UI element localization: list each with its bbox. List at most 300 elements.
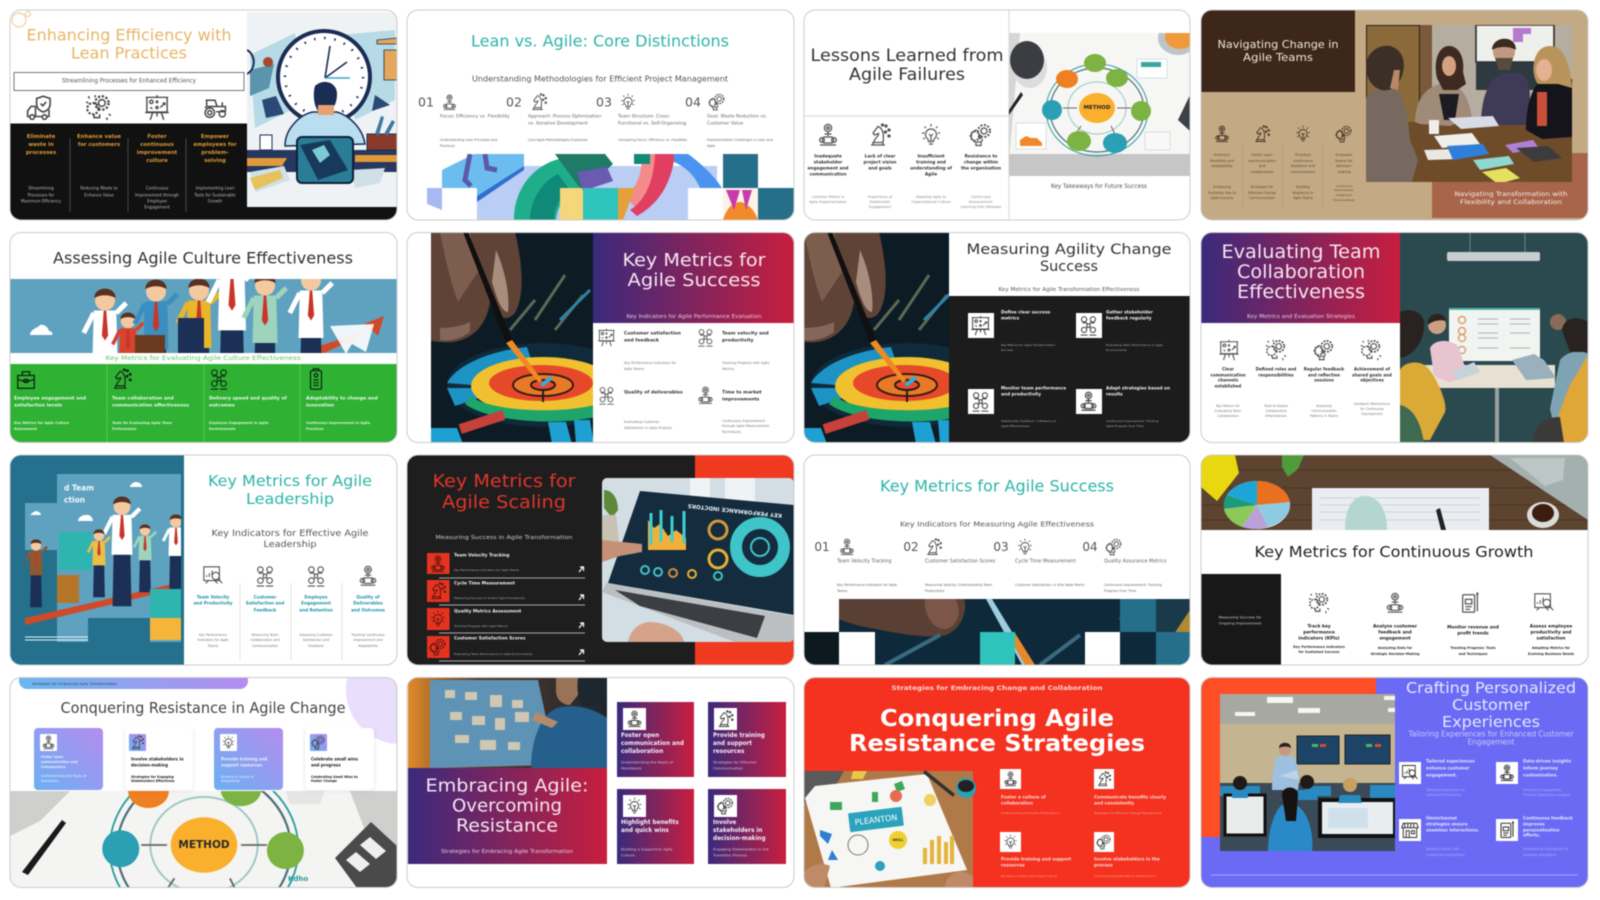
item labels: and reflection <box>1308 372 1340 378</box>
labels: decision- <box>1336 164 1353 168</box>
dark metrics panel: Stakeholder Feedback: A Measure of <box>1001 419 1057 423</box>
strategy tile 4: Transition Process <box>712 852 747 858</box>
dark metrics panel: Adapt strategies based on <box>1106 386 1170 392</box>
tag pill <box>19 672 248 689</box>
item notes: Collaborative <box>1265 409 1287 413</box>
title block: Agile Success <box>628 271 760 291</box>
insights grid: Continuous feedback <box>1523 816 1573 820</box>
numbered items <box>814 539 1167 593</box>
title block <box>1201 232 1400 323</box>
column notes: Growth <box>208 198 223 204</box>
column notes <box>21 186 236 210</box>
item labels: Employee <box>305 594 328 600</box>
slide 8: team collaboration <box>1201 232 1588 443</box>
title: Agile Failures <box>849 65 965 85</box>
item notes: Teams <box>207 644 218 648</box>
title: Success <box>1040 259 1098 275</box>
subtitle: Measuring Success in Agile Transformation <box>436 535 573 541</box>
image: meeting room photo <box>1400 232 1588 443</box>
notes: Effective Change <box>1248 191 1276 195</box>
dark metrics panel: Key Metrics for Agile Transformation <box>1001 343 1055 347</box>
green panel labels: innovation <box>306 402 334 408</box>
title block: Key Metrics for <box>622 251 766 271</box>
slide 4: navigating change <box>1201 10 1588 220</box>
green panel notes: Employee Engagement in Agile <box>209 421 269 425</box>
insights grid: Seamless Navigation <box>1523 853 1556 857</box>
insights grid: Through Data-Driven Insights <box>1522 793 1570 797</box>
image: team meeting photo <box>1366 25 1572 184</box>
item labels: Assess employee <box>1530 624 1572 630</box>
strategy tile 4: stakeholders in <box>713 828 762 834</box>
notes: Improvement: <box>1334 188 1354 192</box>
issue labels: change within <box>964 160 998 166</box>
dark metrics panel: Success <box>1001 348 1014 352</box>
strategy items: Involve stakeholders in the <box>1094 856 1160 862</box>
image: leadership illustration: d Team <box>64 484 94 492</box>
insights grid: efforts. <box>1523 832 1541 838</box>
column notes: Improvement through <box>135 192 179 198</box>
title block: Resistance <box>456 816 558 836</box>
column headings: Foster <box>147 134 167 140</box>
item labels: Feedback <box>254 608 276 612</box>
title block: Key Metrics and Evaluation Strategies <box>1247 314 1355 320</box>
dark metrics panel: Gather stakeholder <box>1106 310 1154 316</box>
strategy items: Communicating Benefits to Stakeholders <box>1094 874 1156 878</box>
insights grid: engagement. <box>1426 772 1458 778</box>
column notes: Streamlining <box>28 186 54 190</box>
column headings: continuous <box>140 142 174 148</box>
item notes: Feedback <box>308 644 324 648</box>
strategy cards: Strategies for Engaging <box>131 775 175 779</box>
metrics grid: Customer satisfaction <box>624 330 681 336</box>
column notes: Implementing Lean <box>196 186 235 190</box>
item labels: Team Velocity <box>197 594 230 600</box>
item labels: satisfaction <box>1536 636 1566 642</box>
item labels: Monitor revenue and <box>1447 624 1499 630</box>
strategy tile 3: Highlight benefits <box>621 820 679 826</box>
subtitle box <box>14 72 244 90</box>
insights grid: personalization <box>1523 828 1560 832</box>
numbered items: Team Structure: Cross- <box>617 114 671 120</box>
issue labels: and goals <box>868 166 892 172</box>
issue notes: Agile Implementation <box>809 200 847 204</box>
labels <box>1210 153 1353 174</box>
strategy cards: decision-making <box>131 762 168 768</box>
title block: Agile Teams <box>1243 52 1313 64</box>
subtitle <box>1408 730 1574 746</box>
dark metrics panel: Evaluating Team Performance in Agile <box>1106 343 1163 347</box>
image: method diagram on desk: METHOD <box>178 839 230 851</box>
metrics grid: Metrics <box>722 367 735 371</box>
dark metrics panel: Monitor team performance <box>1001 386 1066 392</box>
green panel notes: Key Metrics for Agile Culture <box>14 421 70 425</box>
numbered items: Cycle Time Measurement <box>1015 558 1076 564</box>
column headings: processes <box>26 150 56 156</box>
issue notes: Engagement <box>869 205 892 209</box>
title: Crafting Personalized <box>1406 679 1576 697</box>
decorative circle <box>346 636 454 744</box>
strategy cards: and progress <box>311 762 341 768</box>
metric list: Quality Metrics Assessment <box>454 608 521 614</box>
item labels: indicators (KPIs) <box>1298 636 1340 642</box>
numbered items: Continuous Improvement: Tracking <box>1104 583 1162 587</box>
title: Leadership <box>246 490 334 508</box>
issue labels: the organization <box>961 166 1001 172</box>
numbered items: Goal: Waste Reduction vs. <box>707 114 767 120</box>
icons row <box>820 124 990 146</box>
metrics grid: Agile Teams <box>624 367 644 371</box>
notes: Continuous <box>1336 184 1352 188</box>
image: business team illustration <box>10 278 398 354</box>
title <box>1406 679 1576 731</box>
item labels: sessions <box>1314 378 1334 382</box>
numbered items: 03 <box>993 540 1009 554</box>
image: method diagram on desk: Kdho <box>288 875 308 883</box>
column notes: Processes for <box>28 192 55 198</box>
numbered items: Productivity <box>925 589 945 593</box>
insights grid: inform journey <box>1523 766 1558 770</box>
issue notes: Continuous <box>971 195 991 199</box>
title: Conquering Agile <box>880 706 1114 732</box>
green panel notes: Tools for Evaluating Agile Team <box>112 421 172 425</box>
numbered items: Customer Satisfaction: A Vital Agile Metric <box>1015 583 1085 587</box>
strategy tile 2: Strategies for Effective <box>713 760 757 764</box>
metrics grid: Evaluating Customer <box>624 420 660 424</box>
numbered items: 04 <box>685 94 701 110</box>
labels: Foster open <box>1251 153 1273 157</box>
title: Lessons Learned from <box>810 46 1004 66</box>
metric list: Measuring Success in Scaled Agile Frameworks <box>454 596 525 600</box>
dark metrics panel: metrics <box>1001 316 1020 322</box>
numbered items: Customer Satisfaction Scores <box>925 558 996 564</box>
strategy cards: Involve stakeholders in <box>131 756 184 762</box>
item labels: Track key <box>1307 624 1331 630</box>
subtitle: Key Indicators for Effective Agile <box>212 529 368 539</box>
labels: making <box>1337 170 1351 174</box>
item labels: Analyze customer <box>1373 624 1418 630</box>
strategy tile 4: Involve <box>713 820 736 826</box>
slide 14: embracing agile <box>407 677 794 888</box>
item labels: Customer <box>254 594 277 600</box>
item labels: performance <box>1303 630 1335 636</box>
item notes: Evolving Business Needs <box>1528 652 1574 656</box>
item labels: productivity and <box>1531 630 1571 636</box>
item notes: Key Performance <box>199 633 227 637</box>
strategy cards: Foster open <box>41 755 64 759</box>
insights grid: Tailored experiences <box>1426 758 1475 764</box>
item notes: Collaboration <box>1217 414 1239 418</box>
item labels: engagement <box>1379 636 1411 642</box>
strategy items: collaboration <box>1001 800 1033 806</box>
strategy items: Building a Collaborative Agile Culture <box>1001 874 1057 878</box>
side block: Ongoing Improvement <box>1219 620 1262 626</box>
image: pen on target chart <box>744 232 1003 444</box>
green panel notes: Practices <box>306 427 324 431</box>
title: Key Metrics for Continuous Growth <box>1254 543 1534 561</box>
insights grid: Individual Preferences <box>1426 793 1462 797</box>
issue notes <box>809 195 1002 209</box>
decorative rings icon <box>12 12 30 27</box>
numbered items: 01 <box>418 94 434 110</box>
item labels: profit trends <box>1457 630 1489 636</box>
green panel notes: Performance <box>112 427 137 431</box>
column notes: Employee <box>147 198 167 204</box>
dark band <box>10 124 397 220</box>
title: Enhancing Efficiency with <box>26 26 232 44</box>
green panel labels: Employee engagement and <box>14 396 86 402</box>
strategy tile 2 <box>708 702 786 777</box>
column headings: Enhance value <box>77 134 121 140</box>
green panel labels: Team collaboration and <box>112 396 174 402</box>
icons row <box>1216 126 1351 142</box>
item labels: shared goals and <box>1352 372 1392 378</box>
slide 3: lessons learned <box>804 10 1198 220</box>
insights grid: enhance customer <box>1426 766 1470 770</box>
tagline: Strategies for Embracing Change and Collaboration <box>892 684 1103 692</box>
strategy tile 3: Culture <box>621 852 635 858</box>
numbered items: Understanding Lean Principles and <box>440 138 497 142</box>
strategy tile 2: Communication <box>713 766 744 770</box>
item notes: for Sustained Success <box>1299 650 1340 654</box>
green panel notes <box>14 421 371 431</box>
issue notes: Learning from Mistakes <box>961 205 1002 209</box>
metrics grid: Key Performance Indicators for <box>624 361 677 365</box>
item notes: Indicators for Agile <box>197 638 229 642</box>
notes: Communication <box>1249 196 1275 200</box>
item labels: Engagement <box>301 600 331 606</box>
item labels: Clear <box>1222 366 1234 372</box>
item labels <box>193 594 385 612</box>
strategy cards: transparency <box>41 765 66 769</box>
strategy tile 2: resources <box>713 749 745 755</box>
column notes: Reducing Waste to <box>80 186 118 190</box>
image: method diagram on desk: METHOD <box>1084 105 1111 111</box>
item labels: feedback and <box>1378 630 1412 636</box>
issue labels: Agile <box>925 172 937 178</box>
image: laptop dashboard photo <box>602 478 794 642</box>
title block: Overcoming <box>452 796 562 816</box>
strategy items: process <box>1094 862 1113 868</box>
caption: Key Takeaways for Future Success <box>1051 184 1147 190</box>
strategy cards: Stakeholders Effectively <box>131 779 175 783</box>
labels: communication <box>1248 159 1276 163</box>
insights grid: Building Loyalty with <box>1426 847 1459 851</box>
labels: and <box>1259 164 1265 168</box>
numbered items: Teams <box>836 589 848 593</box>
strategy cards: Celebrating Small Wins to <box>311 775 359 779</box>
metric list: Tracking Progress with Agile Metrics <box>453 624 508 628</box>
slide 12: continuous growth <box>1201 455 1588 665</box>
caption block <box>1432 153 1588 218</box>
item labels: established <box>1215 384 1241 388</box>
strategy tile 2: Provide training <box>713 733 765 739</box>
green panel labels: communication effectiveness <box>112 402 189 408</box>
title block: Key Indicators for Agile Performance Evaluation <box>626 314 762 320</box>
insights grid: seamless interactions. <box>1426 828 1480 832</box>
strategy tile 1: communication and <box>621 741 684 747</box>
labels: flexibility and <box>1210 159 1234 163</box>
item labels: Satisfaction and <box>246 600 284 606</box>
item labels: Quality of <box>356 594 380 600</box>
strategy cards <box>34 728 374 790</box>
insights grid: customization. <box>1523 772 1558 778</box>
item notes: Satisfaction and <box>303 638 329 642</box>
dark metrics panel <box>949 296 1190 443</box>
green panel labels: Delivery speed and quality of <box>209 396 288 402</box>
strategy tile 1: Understanding the Roots of <box>621 760 674 764</box>
strategy items: resources <box>1001 862 1025 868</box>
strategy tile 1: Resistance <box>621 766 642 770</box>
numbered items: Measuring Velocity: Understanding Team <box>925 583 992 587</box>
title: Key Metrics for Agile Success <box>880 476 1114 496</box>
item notes: Communication <box>252 644 278 648</box>
strategy items: Provide training and support <box>1001 856 1071 862</box>
strategy items: Communicate benefits clearly <box>1094 794 1166 800</box>
slide 13: conquering resistance <box>10 636 454 900</box>
labels: Prioritize <box>1295 153 1312 157</box>
green panel <box>10 364 397 443</box>
issue labels <box>808 154 1001 178</box>
numbered items: 03 <box>596 94 612 110</box>
title: Lean vs. Agile: Core Distinctions <box>471 32 729 50</box>
numbered items: Customer Value <box>707 120 744 126</box>
green panel icons <box>18 369 322 389</box>
issue labels: engagement and <box>808 166 848 172</box>
issue labels: Resistance to <box>965 154 997 160</box>
slide 10: agile scaling <box>407 455 794 665</box>
column headings: for customers <box>78 142 120 148</box>
strategy cards: Adaptability <box>221 779 240 783</box>
title block <box>593 232 794 323</box>
column notes: Maximum Efficiency <box>21 198 62 204</box>
labels: Embrace <box>1214 153 1231 157</box>
issue labels: communication <box>809 172 847 178</box>
metric list: Customer Satisfaction Scores <box>454 636 526 642</box>
insights grid: Omnichannel <box>1426 816 1457 820</box>
title <box>966 242 1172 275</box>
title block <box>408 768 607 864</box>
metric list: Evaluating Team Performance in Agile Environments <box>454 652 533 656</box>
image: pen close-up checker strip <box>804 599 1190 665</box>
metrics grid <box>598 329 770 434</box>
strategy tile 3: and quick wins <box>621 828 669 834</box>
numbered items: vs. Iterative Development <box>528 120 588 126</box>
slide 9: agile leadership <box>10 455 397 665</box>
metrics grid: Quality of deliverables <box>624 390 683 396</box>
image: leadership illustration: ction <box>64 496 85 504</box>
issue notes: Importance of <box>868 195 893 199</box>
slide 16: personalized customer experiences <box>1201 677 1588 888</box>
numbered items: Team Velocity Tracking <box>836 558 892 564</box>
metrics grid: productivity <box>722 338 754 344</box>
insights grid: Data-driven insights <box>1523 758 1572 764</box>
title <box>810 46 1004 85</box>
icons row <box>204 566 376 586</box>
column notes: Tools for Sustainable <box>193 192 236 198</box>
issue notes: Organizational Culture <box>911 200 951 204</box>
title: Customer <box>1452 696 1531 714</box>
notes: Agile Success <box>1211 196 1234 200</box>
notes: Strategies for <box>1251 185 1274 189</box>
issue notes: Adapting Agile to <box>916 195 946 199</box>
image: method diagram on desk <box>10 745 397 900</box>
metrics grid: Continuous Improvement <box>722 419 766 423</box>
notes: Adapting to <box>1336 193 1352 197</box>
subtitle: Key Metrics for Agile Transformation Effectiveness <box>998 287 1140 293</box>
notes: Building <box>1296 185 1310 189</box>
green panel notes: Environments <box>209 427 235 431</box>
column notes: Continuous <box>146 186 168 190</box>
title <box>208 472 372 508</box>
strategy cards: Understanding the Roots of <box>41 774 87 778</box>
title: Key Metrics for <box>432 472 576 492</box>
slide 6: key metrics for agile success <box>380 232 794 444</box>
image: leadership illustration <box>10 455 189 665</box>
item notes: Analyzing Data for <box>1378 646 1413 650</box>
numbered items: Focus: Efficiency vs. Flexibility <box>440 114 510 120</box>
strategy tile 4 <box>708 789 786 864</box>
image: laptop dashboard photo: KEY PERFORMANCE INDCTORS <box>688 502 782 518</box>
item notes: Feedback Mechanisms <box>1354 402 1390 406</box>
strategy tile 4: decision-making <box>713 836 766 842</box>
image: hand-drawn plan photo <box>804 770 976 888</box>
item labels: channels <box>1218 378 1239 382</box>
numbered items: Functional vs. Self-Organizing <box>618 120 686 126</box>
item notes: Measuring Team <box>252 633 278 637</box>
dark metrics panel: Agile Effectiveness <box>1001 424 1030 428</box>
slide 1: lean practices <box>10 10 397 220</box>
labels: adaptability <box>1211 164 1234 168</box>
title block: Collaboration <box>1237 261 1365 283</box>
issue labels: Insufficient <box>917 154 945 160</box>
title: Resistance Strategies <box>849 731 1145 757</box>
item notes: Assessing Customer <box>299 633 333 637</box>
insights grid: Streamlining Touchpoints for <box>1523 847 1569 851</box>
numbered items: 02 <box>506 94 522 110</box>
column headings: improvement <box>137 150 178 156</box>
insights grid: Tailoring Experiences for <box>1425 788 1466 792</box>
numbered items: Agile <box>707 144 715 148</box>
item labels: and Productivity <box>193 600 233 606</box>
metric list: Cycle Time Measurement <box>454 580 515 586</box>
notes: Evolving Needs <box>1333 198 1355 202</box>
item notes <box>197 633 385 648</box>
item labels <box>1298 624 1572 642</box>
caption: Key Metrics for Evaluating Agile Culture Effectiveness <box>106 354 301 362</box>
issue labels: understanding of <box>910 166 952 172</box>
strategy cards: communication and <box>41 760 78 764</box>
numbered items: 02 <box>903 540 919 554</box>
labels: continuous <box>1293 159 1313 163</box>
item labels: and Outcomes <box>351 608 385 612</box>
item notes: Key Performance Indicators <box>1293 645 1345 649</box>
item notes: Communication <box>1311 409 1337 413</box>
item notes: Improvement <box>1361 412 1383 416</box>
dark metrics panel: Agile Progress Over Time <box>1106 424 1144 428</box>
numbered items: Comparing Focus: Efficiency vs. Flexibility <box>618 138 687 142</box>
strategy cards: Resistance <box>41 779 59 783</box>
metric list: Team Velocity Tracking <box>454 552 509 558</box>
item labels: responsibilities <box>1258 372 1294 378</box>
dark metrics panel: results <box>1106 392 1123 398</box>
item notes: Adaptability <box>358 644 378 648</box>
dark metrics panel: feedback regularly <box>1106 316 1152 322</box>
issue labels: stakeholder <box>814 160 843 166</box>
title block: Effectiveness <box>1237 281 1365 303</box>
labels: improvement <box>1291 170 1316 174</box>
strategy cards: Celebrate small wins <box>311 756 359 762</box>
icons row <box>1219 340 1381 360</box>
